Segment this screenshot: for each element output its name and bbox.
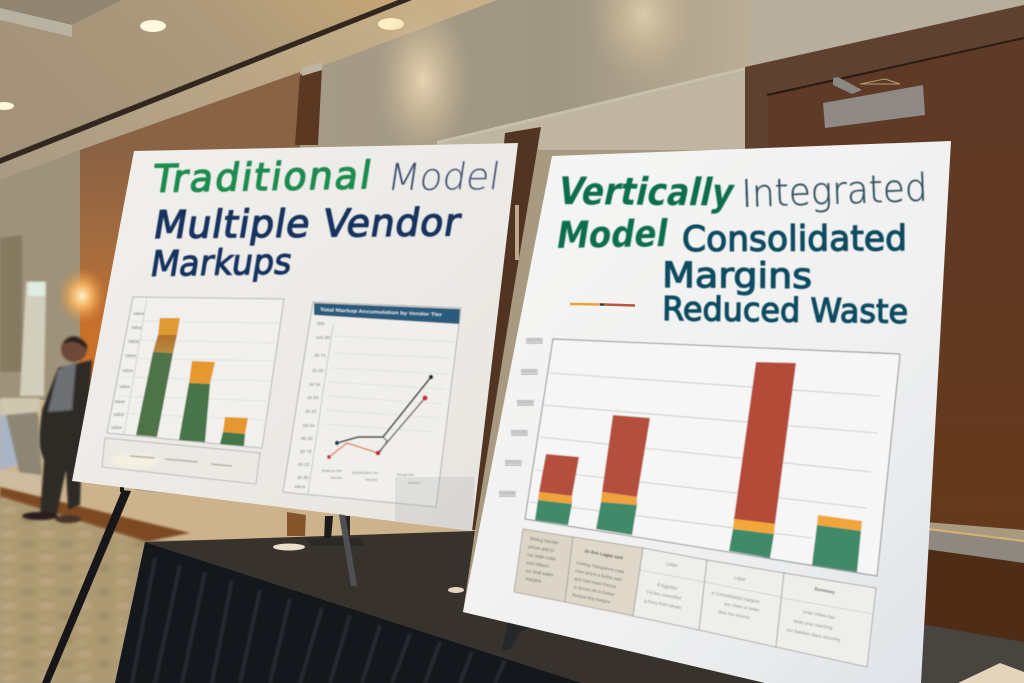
heading: traditional model (148, 153, 503, 202)
heading: model: Model (554, 211, 672, 257)
table text: plus the returns (718, 609, 751, 620)
heading: vertically integrated: Vertically (554, 169, 739, 215)
line chart axis labels: 36 20 (301, 436, 313, 441)
heading: vertically integrated: Integrated (741, 166, 928, 216)
line chart category labels: Vendor (408, 480, 421, 485)
table text: Over and in a further sale (575, 568, 623, 582)
cell 4 (699, 560, 784, 647)
axis labels: Value (122, 368, 134, 373)
left wall (0, 150, 106, 400)
table text: Ju Asx Lagas sort (584, 548, 624, 561)
bar: first (136, 318, 180, 437)
line chart (283, 302, 461, 507)
cell 5 (776, 573, 876, 667)
table text: and reduce (526, 560, 550, 569)
axis labels: 000000 (521, 369, 538, 375)
heading: multiple vendor markups (148, 201, 464, 285)
table text: margins (525, 576, 542, 584)
axis labels: Value (111, 425, 123, 430)
table text: Rising Vendor (530, 536, 559, 546)
table skirt (115, 542, 582, 683)
heading: vertically integrated (554, 166, 928, 216)
axis labels: Value (131, 325, 143, 330)
axis labels (111, 311, 145, 430)
line chart axis labels: 20 32 (305, 409, 317, 414)
series: orange line (329, 443, 378, 457)
axis labels: Value (125, 353, 137, 358)
axis labels: Value (113, 412, 125, 417)
table text: Reduce Any margins (572, 592, 611, 604)
table top right of board (905, 622, 1024, 683)
cell 3 (633, 548, 707, 630)
axis labels: 000000 (499, 491, 516, 497)
axis labels: Value (128, 339, 140, 344)
table text: g Ascy from Ideals (644, 598, 682, 610)
table text: w Consolidated margins (711, 590, 761, 604)
bar: second (596, 415, 650, 535)
carpet (0, 497, 145, 683)
line chart axis labels: 59 54 (303, 423, 315, 428)
heading: traditional model: Model (385, 154, 503, 199)
light reflection (395, 477, 475, 531)
axis labels (499, 338, 543, 497)
line chart axis labels: 34 04 (309, 382, 321, 387)
line chart category labels: Vendor (365, 477, 378, 482)
line chart axis labels: 16 50 (307, 395, 319, 400)
axis labels: Value (119, 384, 131, 389)
bar: fourth (812, 515, 862, 572)
heading: consolidated margins reduced waste: Consolidated (682, 219, 907, 260)
background table (0, 398, 42, 495)
table (115, 531, 1024, 683)
table text: Limiting Transparent costs (576, 560, 625, 574)
upper walls (318, 0, 1024, 160)
line chart axis labels: 30 30 (297, 475, 309, 480)
easel supports (42, 484, 535, 683)
line chart category labels: Vendor (330, 475, 343, 480)
series: black line (337, 377, 431, 443)
heading: multiple vendor markups: Multiple Vendor (150, 201, 464, 248)
line chart axis labels (294, 321, 330, 489)
comparison table (514, 529, 876, 667)
cell 1 (514, 529, 573, 602)
axis labels: Value (133, 311, 145, 316)
axis labels: 000000 (511, 430, 528, 436)
line chart axis labels: Value (294, 484, 306, 489)
table text: our Solution does returning (786, 627, 841, 643)
line chart category labels: Retail tier (397, 472, 415, 477)
table text: Summary (814, 586, 836, 595)
panel: vertically integrated model board (463, 141, 951, 683)
bar chart: vertically integrated (499, 338, 900, 576)
table text: our final sales (525, 568, 554, 578)
bar: second (179, 361, 215, 442)
heading: consolidated margins reduced waste: Margins (662, 256, 812, 297)
bar chart: traditional (107, 297, 284, 448)
heading: traditional model: Traditional (148, 153, 374, 202)
line chart axis labels: 140 90 (316, 335, 330, 340)
paper on table (958, 663, 1024, 683)
centre door frame (468, 127, 541, 530)
table text: Label (734, 575, 746, 582)
panel: traditional model board (72, 143, 518, 531)
table text: prices add to (528, 544, 555, 553)
line chart axis labels: 20 78 (300, 449, 312, 454)
cell 2 (565, 537, 643, 616)
table text: Label (666, 561, 678, 568)
table text: enter Hines has (803, 609, 836, 620)
axis labels: 000000 (517, 400, 534, 406)
line chart category labels: Markup tier (322, 468, 343, 473)
wood panels (72, 62, 322, 480)
bar: first (535, 454, 579, 525)
axis labels: 000000 (526, 338, 543, 344)
table text: Circles controlled (646, 589, 682, 601)
heading: multiple vendor markups: Markups (148, 242, 295, 285)
line chart axis labels: 28 74 (314, 353, 326, 358)
person (22, 336, 92, 523)
right door (745, 5, 1024, 643)
heading: consolidated margins reduced waste (662, 219, 908, 331)
bar: third (729, 362, 796, 558)
line chart axis labels: 25 32 (298, 462, 310, 467)
legend line (570, 304, 635, 306)
bar: third (220, 417, 248, 446)
table text (525, 536, 841, 643)
axis labels: Value (114, 399, 126, 404)
table text: our total costs (527, 552, 557, 562)
heading: consolidated margins reduced waste: Reduced Waste (662, 289, 908, 331)
axis labels: 000000 (505, 460, 522, 466)
table text: away your reaching (793, 618, 833, 631)
table top (145, 531, 765, 683)
lower wall and baseboard (0, 400, 475, 542)
line chart category labels: Distribution tier (352, 470, 379, 475)
line chart category labels (322, 468, 421, 485)
chart title bar: Total Markup Accumulation by Vendor Tier (320, 307, 442, 317)
line chart axis labels: 20 26 (312, 368, 324, 373)
table text: or Across me in further (573, 584, 616, 597)
table text: and Total lower Format (574, 576, 617, 589)
door closer (823, 77, 925, 128)
line chart axis labels: 000 (317, 321, 325, 326)
series: grey line (378, 398, 425, 453)
chart title bar (314, 303, 460, 324)
table text: 8 Kgpulse (657, 582, 678, 591)
legend box (102, 438, 260, 484)
table text: our chain is lower (724, 601, 760, 613)
